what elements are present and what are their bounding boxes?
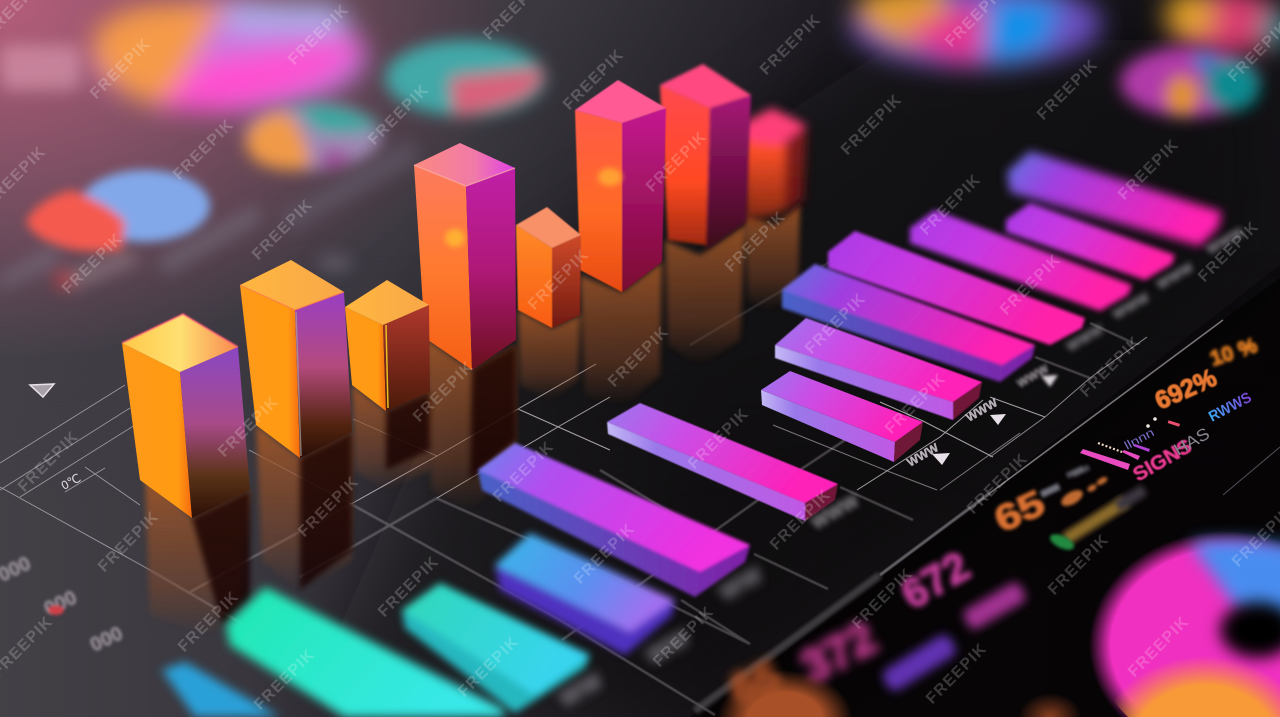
FREEPIK watermarks: FREEPIK (175, 588, 243, 656)
horizontal bar: blue (495, 533, 675, 655)
caption: HAS: HAS (1170, 424, 1213, 459)
blurred pie chart: orange and red top right (1165, 0, 1280, 54)
FREEPIK watermarks: FREEPIK (802, 290, 870, 358)
blurred pie chart: magenta and teal (1120, 47, 1260, 117)
FREEPIK watermarks: FREEPIK (605, 323, 673, 391)
FREEPIK watermarks: FREEPIK (560, 46, 628, 114)
row labels: WWW (1204, 224, 1247, 258)
FREEPIK watermarks: FREEPIK (1115, 136, 1183, 204)
FREEPIK watermarks: FREEPIK (882, 370, 950, 438)
FREEPIK watermarks: FREEPIK (1195, 218, 1263, 286)
blurred pie chart: teal and pink (385, 40, 545, 116)
blurred pie chart: yellow, magenta and blue (850, 0, 1102, 68)
floor grid lines (0, 250, 1280, 715)
horizontal bar: green (226, 587, 505, 717)
stat: small purple caption: llnnn (1122, 425, 1157, 453)
horizontal bar: fifth row (782, 264, 1035, 382)
FREEPIK watermarks: FREEPIK (59, 230, 127, 298)
blurred legends and captions (0, 45, 420, 290)
horizontal bar: second row (1006, 203, 1175, 280)
vertical bar 1 (122, 314, 250, 518)
row labels (554, 224, 1247, 713)
FREEPIK watermarks: FREEPIK (685, 405, 753, 473)
FREEPIK watermarks: FREEPIK (251, 646, 319, 714)
horizontal bar: eighth row (607, 403, 838, 521)
horizontal bar: ninth row (478, 443, 750, 597)
stat: 65: 65 (988, 482, 1051, 540)
stat blurred orange: 65 (723, 652, 787, 715)
FREEPIK watermarks: FREEPIK (15, 428, 83, 496)
caption: blue: RWWS (1206, 389, 1254, 426)
FREEPIK watermarks: FREEPIK (375, 553, 443, 621)
right side statistics (715, 334, 1260, 717)
FREEPIK watermarks: FREEPIK (964, 450, 1032, 518)
FREEPIK watermarks: FREEPIK (455, 633, 523, 701)
FREEPIK watermarks: FREEPIK (525, 246, 593, 314)
horizontal bar: blurred blue (162, 662, 280, 717)
FREEPIK watermarks: FREEPIK (285, 1, 353, 69)
stat: 372: 372 (792, 611, 884, 693)
orange small caption (1059, 475, 1109, 509)
donut: hole (1220, 602, 1280, 658)
blurred pie chart: orange and teal (245, 102, 381, 170)
row labels: WWW (1110, 289, 1153, 323)
FREEPIK watermarks: FREEPIK (490, 438, 558, 506)
icon: small triangle (30, 384, 54, 397)
donut: magenta segment (1088, 530, 1280, 717)
donut: blue segment (1190, 540, 1280, 640)
FREEPIK watermarks: FREEPIK (1077, 333, 1145, 401)
stat blurred orange blob (715, 668, 855, 717)
FREEPIK watermarks: FREEPIK (650, 603, 718, 671)
caption amber (1062, 496, 1130, 545)
row labels: WWW (1014, 361, 1052, 391)
reflections of vertical bars on floor (145, 205, 800, 635)
row labels: WW (554, 667, 608, 713)
FREEPIK watermarks: FREEPIK (170, 116, 238, 184)
stat: 692%: 692% (1151, 364, 1221, 415)
horizontal bar: teal (402, 583, 590, 713)
blurred left labels: 000 (87, 622, 126, 657)
stat: pink bar (1080, 449, 1130, 470)
horizontal bar: seventh row (761, 371, 923, 462)
blurred left labels (0, 552, 126, 657)
horizontal bar: top row (1007, 151, 1222, 246)
FREEPIK watermarks: FREEPIK (767, 486, 835, 554)
horizontal bar: third row (910, 210, 1132, 311)
horizontal bar: sixth row (775, 318, 982, 420)
blurred pie chart: coral and blue (26, 170, 210, 252)
bar value labels (0, 224, 1247, 713)
vertical bar 5 (516, 207, 581, 328)
FREEPIK watermarks: FREEPIK (757, 11, 825, 79)
FREEPIK watermarks: FREEPIK (365, 81, 433, 149)
row labels: WW (714, 561, 768, 607)
FREEPIK watermarks: FREEPIK (571, 520, 639, 588)
floor shadows (192, 345, 516, 625)
row labels: WWW (1064, 321, 1107, 355)
vertical bar 3 (345, 280, 430, 411)
FREEPIK watermarks: FREEPIK (95, 508, 163, 576)
row labels: WWW (964, 395, 1001, 425)
FREEPIK watermarks: FREEPIK (923, 640, 991, 708)
stat: 10: 10 % (1207, 334, 1260, 371)
stat: pink small bars (1122, 444, 1150, 460)
stat blurred orange bottom (1016, 692, 1084, 717)
donut: orange segment (1114, 658, 1280, 717)
donut chart (1088, 530, 1280, 717)
stat: 672: 672 (893, 542, 977, 618)
stat: grey captions (1040, 464, 1090, 498)
caption grey (1114, 484, 1148, 512)
caption violet (880, 632, 959, 694)
FREEPIK watermarks: FREEPIK (249, 196, 317, 264)
row labels: WWW (808, 491, 862, 533)
horizontal bar: fourth row (828, 231, 1085, 345)
vertical bar 2 (240, 260, 352, 458)
FREEPIK watermarks: FREEPIK (1045, 531, 1113, 599)
FREEPIK watermarks: FREEPIK (838, 91, 906, 159)
FREEPIK watermarks: FREEPIK (643, 128, 711, 196)
caption green (1048, 531, 1076, 553)
FREEPIK watermarks: FREEPIK (1125, 613, 1193, 681)
FREEPIK watermarks: FREEPIK (1034, 56, 1102, 124)
row labels: WW (642, 624, 695, 670)
caption magenta (961, 580, 1028, 631)
FREEPIK watermarks: FREEPIK (849, 565, 917, 633)
label under triangle: 0℃ (59, 471, 83, 493)
FREEPIK watermarks: FREEPIK (87, 35, 155, 103)
vertical bar 6 (575, 80, 666, 292)
FREEPIK watermarks: FREEPIK (917, 171, 985, 239)
FREEPIK watermarks: FREEPIK (722, 208, 790, 276)
blurred pie chart: large magenta and orange (90, 0, 366, 112)
vertical bar 4 (414, 143, 516, 370)
FREEPIK watermarks: FREEPIK (215, 393, 283, 461)
row labels: WWW (904, 440, 942, 470)
FREEPIK watermarks: FREEPIK (997, 251, 1065, 319)
FREEPIK watermarks: FREEPIK (295, 473, 363, 541)
caption: SIGNS: SIGNS (1130, 435, 1196, 486)
vertical bar 8 (740, 108, 806, 220)
dots (1098, 417, 1180, 452)
blurred left labels: 000 (41, 586, 80, 621)
FREEPIK watermarks: FREEPIK (410, 358, 478, 426)
vertical bar 7 (660, 64, 751, 250)
row labels: WWW (1154, 259, 1197, 293)
